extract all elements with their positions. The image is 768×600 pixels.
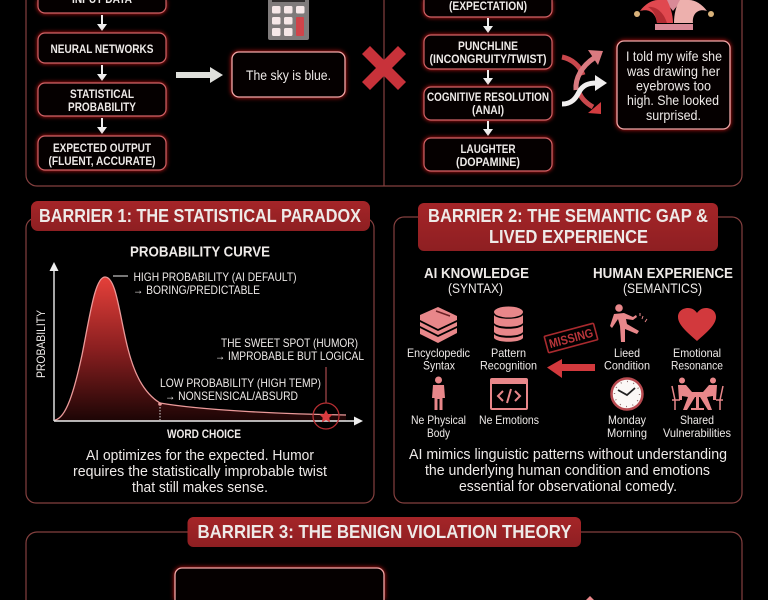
icon: diamond top [586,596,594,600]
arrow: missing link [547,359,595,378]
flow box: laughter: LAUGHTER [460,142,516,156]
flow box: cognitive resolution [424,87,552,120]
text block: barrier 1 summary: AI optimizes for the expected. Humor [86,448,314,464]
icon labels: AI knowledge: Encyclopedic [407,346,470,360]
icon labels: AI knowledge: Ne Emotions [479,413,539,427]
text block: barrier 2 summary: the underlying human condition and emotions [425,463,710,479]
icon labels: human experience: Condition [604,358,650,372]
flow box: expectation [424,0,552,17]
annotation: sweet spot: THE SWEET SPOT (HUMOR) [221,336,358,350]
column heading: AI knowledge [424,266,529,296]
flow box: neural networks: NEURAL NETWORKS [50,42,154,56]
flow box: cognitive resolution: (ANAI) [472,103,504,117]
icon labels: human experience: Shared [680,413,714,427]
icon labels: human experience: Resonance [671,358,723,372]
icon labels: human experience: Lieed [614,346,640,360]
panel: barrier 3 [26,517,742,600]
panel: barrier 2 [394,203,742,503]
column heading: human experience: HUMAN EXPERIENCE [593,266,733,282]
icon: red cross [362,46,406,90]
column heading: human experience [593,266,733,296]
column heading: human experience: (SEMANTICS) [623,280,702,296]
chart: probability curve [50,262,363,429]
axis label: word choice: WORD CHOICE [167,429,241,441]
text block: barrier 1 summary: requires the statistically improbable twist [73,464,327,480]
arrow: probability to output [97,118,107,134]
annotation: low probability: → NONSENSICAL/ABSURD [165,389,298,403]
icon: slipping person [610,304,647,342]
icon labels: AI knowledge [407,346,539,440]
annotation: high probability: HIGH PROBABILITY (AI DEFAULT) [134,270,296,284]
output box: the sky is blue [232,52,345,97]
icon labels: AI knowledge: Pattern [491,346,526,360]
flow box: laughter: (DOPAMINE) [456,155,520,169]
icon: books [420,307,457,343]
flow box: statistical probability: STATISTICAL [70,87,134,101]
icon labels: AI knowledge: Ne Physical [411,413,466,427]
icon: jester hat [634,0,714,30]
joke box: high. She looked [627,92,719,108]
annotation: high probability [133,270,296,297]
text block: barrier 1 summary: that still makes sense. [132,480,268,496]
flow box: expected output [38,136,166,170]
flow box: cognitive resolution: COGNITIVE RESOLUTION [427,90,549,104]
flow box: expected output: (FLUENT, ACCURATE) [48,154,156,168]
icon: clock [612,378,642,410]
heading: barrier 1: BARRIER 1: THE STATISTICAL PARADOX [39,205,362,226]
arrow: input to networks [97,15,107,31]
icon labels: human experience [604,346,731,440]
panel: top comparison [26,0,742,186]
arrow: expectation to punchline [483,18,493,33]
text block: barrier 1 summary [73,448,327,496]
chart title: PROBABILITY CURVE [130,244,270,260]
icon labels: AI knowledge: Syntax [423,358,455,372]
panel: barrier 1 [26,201,374,503]
icon labels: human experience: Emotional [673,346,721,360]
stamp: missing: MISSING [548,326,595,351]
flow box: neural networks [38,33,166,63]
icon: heart [678,308,716,341]
column heading: AI knowledge: (SYNTAX) [448,280,503,296]
flow box: expected output: EXPECTED OUTPUT [53,141,152,155]
flow box: punchline: (INCONGRUITY/TWIST) [430,52,546,66]
arrow: punchline to resolution [483,70,493,85]
arrow: resolution to laughter [483,121,493,136]
arrow: networks to probability [97,65,107,81]
icon: person [432,376,445,410]
text block: barrier 2 summary: AI mimics linguistic patterns without understanding [409,447,727,463]
annotation: low probability [160,376,321,403]
flow box: punchline [424,35,552,69]
icon labels: human experience: Vulnerabilities [663,426,731,440]
heading: barrier 2: BARRIER 2: THE SEMANTIC GAP & [428,205,708,226]
icon: calculator [268,0,309,40]
flow box: statistical probability: PROBABILITY [68,100,136,114]
box: benign violation [175,568,384,600]
annotation: low probability: LOW PROBABILITY (HIGH TEMP) [160,376,321,390]
annotation: high probability: → BORING/PREDICTABLE [133,283,260,297]
icon labels: human experience: Monday [608,413,646,427]
icon: twisting arrows [562,50,607,114]
joke box: eyebrows too [636,78,711,94]
flow box: laughter [424,138,552,171]
heading: barrier 3 [188,517,581,547]
heading: barrier 2 [418,203,718,251]
icon: code window [491,379,527,409]
joke box [617,41,730,129]
joke box: I told my wife she [626,48,722,64]
output box: the sky is blue: The sky is blue. [246,67,331,83]
icon: people at table [672,378,723,410]
heading: barrier 3: BARRIER 3: THE BENIGN VIOLATION THEORY [198,522,572,542]
heading: barrier 2: LIVED EXPERIENCE [489,226,648,247]
icon labels: AI knowledge: Recognition [480,358,537,372]
joke box: surprised. [646,107,701,123]
flow box: statistical probability [38,83,166,116]
icon: database [494,306,523,342]
flow box: punchline: PUNCHLINE [458,39,518,53]
text block: barrier 2 summary: essential for observational comedy. [459,479,677,495]
text block: barrier 2 summary [409,447,727,495]
icon labels: AI knowledge: Body [427,426,450,440]
arrow: to AI output [176,67,223,83]
icon labels: human experience: Morning [607,426,647,440]
column heading: AI knowledge: AI KNOWLEDGE [424,266,529,282]
annotation: sweet spot [215,336,364,363]
joke box: was drawing her [626,63,720,79]
heading: barrier 1 [31,201,370,231]
flow box: input data [38,0,166,13]
annotation: sweet spot: → IMPROBABLE BUT LOGICAL [215,349,364,363]
axis label: probability: PROBABILITY [36,310,48,378]
